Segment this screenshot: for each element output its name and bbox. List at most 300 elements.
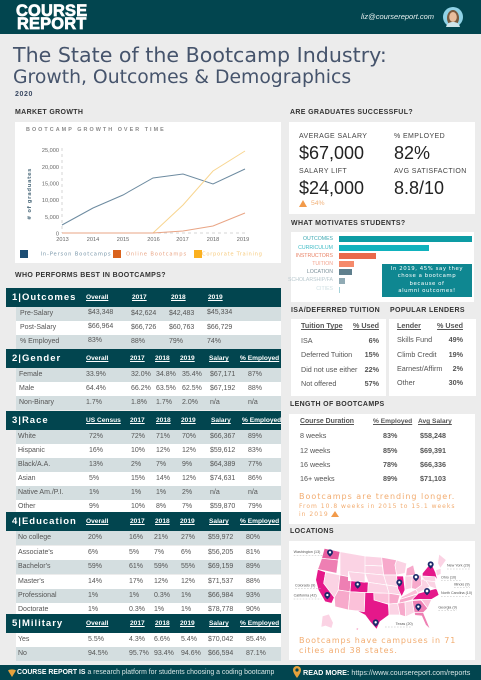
table: race: 15% (131, 475, 145, 482)
table: education: 61% (129, 563, 143, 570)
stat: satisfaction: 8.8/10 (394, 178, 444, 198)
table: education: Doctorate (18, 606, 48, 613)
heading: market growth: MARKET GROWTH (15, 109, 83, 116)
table: education: 81% (246, 548, 260, 556)
table: outcomes: $42,483 (169, 310, 194, 317)
callout: In 2019, 45% say they (391, 266, 463, 272)
table: education: 1% (88, 606, 98, 613)
military header: 2019 (180, 620, 195, 627)
table: outcomes (6, 288, 281, 349)
table: race: $59,870 (210, 503, 235, 510)
table: education: 20% (88, 534, 102, 541)
table: gender: Male (19, 385, 34, 392)
panel: lenders table: Lender (397, 321, 421, 330)
line chart: Online Bootcamps (126, 252, 187, 258)
table: outcomes: $66,726 (131, 324, 156, 331)
header bar (0, 0, 481, 34)
table: gender: 63.5% (156, 385, 176, 392)
stat: average salary: $67,000 (299, 143, 364, 163)
callout: campuses: cities and 38 states. (299, 646, 398, 654)
table: outcomes: % Employed (20, 338, 59, 345)
logo: COURSE (16, 2, 87, 20)
table: education: Associate's (18, 548, 53, 556)
stat: percent employed (394, 133, 445, 163)
education header: Overall (86, 518, 108, 525)
table: gender: n/a (248, 399, 258, 406)
table: education: 5% (129, 548, 139, 556)
table: race: Other (18, 503, 36, 510)
panel: length of bootcamps: $58,248 (420, 431, 446, 440)
race header: 2019 (181, 417, 196, 424)
callout: campuses (299, 636, 456, 654)
table: education: 1% (154, 606, 164, 613)
table: race: $74,631 (210, 475, 235, 482)
table: race: Black/A.A. (18, 461, 50, 468)
table: outcomes: $43,348 (88, 308, 113, 316)
map labels: Georgia (9) (438, 605, 457, 609)
panel: length of bootcamps: 12 weeks (300, 446, 330, 455)
table: education: $71,537 (208, 578, 233, 584)
map pins (324, 549, 434, 627)
callout: because of (410, 281, 444, 287)
gender header: 2019 (180, 355, 195, 362)
table: race: $66,367 (210, 433, 235, 440)
table: gender: 62.5% (182, 385, 202, 392)
table: gender (6, 349, 281, 410)
panel: motivations bar chart (291, 232, 474, 302)
bar: scholarship: SCHOLARSHIP/FA (288, 277, 333, 283)
table: gender: 35.4% (182, 371, 202, 378)
table: education: 90% (246, 606, 260, 613)
panel: market growth chart (15, 122, 281, 263)
table: education: 0.3% (154, 592, 170, 599)
panel: lenders table: 2% (453, 364, 463, 373)
line chart: 2014 (87, 237, 99, 243)
panel: length of bootcamps: 83% (383, 431, 397, 440)
table: race: 7% (182, 503, 192, 510)
table: education: 59% (154, 563, 168, 570)
table: education: $66,984 (208, 592, 233, 599)
table: gender: 88% (248, 385, 262, 392)
panel: length of bootcamps: $71,103 (420, 474, 446, 483)
callout: trending longer: Bootcamps are trending longer. (299, 492, 455, 501)
table: race: 2% (182, 489, 192, 496)
line chart: 15,000 (42, 182, 59, 188)
table: gender: 2.0% (182, 399, 198, 406)
chart title: BOOTCAMP GROWTH OVER TIME (26, 127, 166, 133)
table: education: 12% (181, 578, 195, 584)
table: race: 8% (156, 503, 166, 510)
line chart: 2013 (56, 237, 69, 243)
callout: chose a bootcamp (398, 273, 456, 279)
subtitle: Growth, Outcomes & Demographics (13, 67, 351, 88)
race header: 3|Race (12, 415, 49, 426)
table: education: 27% (181, 534, 195, 541)
callout (382, 264, 472, 297)
table: race: 9% (182, 461, 192, 468)
panel: lenders table: Earnest/Affirm (397, 364, 442, 373)
gender header: % Employed (240, 355, 279, 362)
callout: campuses: Bootcamps have campuses in 71 (299, 636, 456, 645)
heading: motivations: WHAT MOTIVATES STUDENTS? (291, 220, 406, 227)
panel: tuition table: ISA (301, 336, 313, 345)
panel: tuition table: Not offered (301, 379, 336, 388)
panel: lenders table: 49% (449, 335, 463, 344)
table: outcomes: $66,729 (207, 324, 232, 331)
panel: tuition table: 57% (365, 379, 379, 388)
bar: instructors: INSTRUCTORS (296, 253, 333, 259)
table: gender: 32.0% (131, 371, 151, 378)
icon: location pin (293, 666, 301, 678)
table: race: 10% (131, 503, 145, 510)
education header: 2017 (130, 518, 145, 525)
footer bar (0, 665, 481, 680)
table: education: 1% (129, 592, 139, 599)
table: military: 5.5% (88, 636, 104, 643)
military header (6, 614, 281, 633)
race header: % Employed (242, 417, 281, 424)
callout: trending longer (299, 492, 455, 518)
table: education: 93% (246, 592, 260, 599)
line chart: 2017 (176, 237, 189, 243)
education header: 4|Education (12, 516, 77, 527)
panel: length of bootcamps: 89% (383, 474, 397, 483)
map labels (294, 550, 472, 626)
table: race: 5% (89, 475, 99, 482)
line chart: 0 (56, 232, 59, 238)
table: race: 71% (156, 433, 170, 440)
table: race: 83% (248, 447, 262, 454)
table: race: 7% (156, 461, 166, 468)
table: education: 17% (129, 578, 143, 584)
table: race: Native Am./P.I. (18, 489, 63, 496)
stat: average salary (299, 133, 367, 163)
military header: Salary (209, 620, 229, 627)
panel: tuition table: 6% (369, 336, 379, 345)
table: outcomes: $66,964 (88, 322, 113, 330)
bar: curriculum (298, 245, 429, 251)
table: race: Hispanic (18, 447, 45, 454)
table: race: 16% (89, 447, 103, 454)
panel: length of bootcamps: 16 weeks (300, 460, 330, 469)
panel: tuition table: Deferred Tuition (301, 350, 352, 359)
table: education: 88% (246, 578, 260, 584)
panel: length of bootcamps: Avg Salary (418, 418, 452, 425)
table: race (6, 411, 281, 512)
table: military: 4.3% (129, 636, 145, 643)
icon: wifi signal (8, 669, 16, 677)
table: race: 79% (248, 503, 262, 510)
panel: locations (289, 541, 475, 660)
panel: length of bootcamps: % Employed (373, 418, 412, 425)
table: education: $59,972 (208, 534, 233, 541)
table: race: White (18, 433, 36, 440)
line chart: 2018 (207, 237, 219, 243)
panel: length of bootcamps: 85% (383, 446, 397, 455)
line chart (20, 148, 263, 258)
table: gender: 33.9% (86, 371, 106, 378)
stat: satisfaction: AVG SATISFACTION (394, 168, 467, 175)
table: race: 12% (182, 475, 196, 482)
table: race: 1% (89, 489, 99, 496)
table: gender: Female (19, 371, 42, 378)
race header: Salary (211, 417, 231, 424)
year: 2020 (15, 91, 33, 98)
table: education: 21% (154, 534, 168, 541)
map labels: Ohio (10) (441, 575, 456, 579)
panel: lenders table (389, 319, 476, 396)
military header: 2017 (130, 620, 145, 627)
heading: ISA: ISA/DEFERRED TUITION (291, 307, 380, 314)
line chart: 5,000 (45, 215, 59, 221)
education header: % Employed (240, 518, 279, 525)
bar: outcomes (303, 236, 472, 242)
gender header: Salary (209, 355, 229, 362)
table: education (6, 512, 281, 614)
table: gender: 34.8% (156, 371, 176, 378)
table: education: $69,159 (208, 563, 233, 570)
callout: alumni outcomes! (398, 288, 456, 294)
panel: lenders table: 30% (449, 378, 463, 387)
table: education: $56,205 (208, 548, 233, 556)
panel: tuition table: % Used (353, 321, 379, 330)
table: military: 94.6% (181, 650, 201, 656)
heading: lenders: POPULAR LENDERS (390, 307, 465, 314)
table: outcomes: Pre-Salary (20, 310, 53, 317)
table: race: 1% (131, 489, 141, 496)
callout: trending longer: From 10.8 weeks in 2015 to 15.1 weeks (299, 503, 455, 510)
table: race: 14% (156, 475, 170, 482)
heading: locations: LOCATIONS (290, 528, 334, 535)
icon: author portrait (443, 7, 463, 27)
title: The State of the Bootcamp Industry: (13, 43, 387, 67)
table: gender: Non-Binary (19, 399, 54, 406)
table: education: 1% (181, 606, 191, 613)
outcomes header: 2019 (208, 294, 223, 301)
table: gender: n/a (210, 399, 220, 406)
callout: trending longer: in 2019 (299, 510, 329, 518)
table: military: No (18, 650, 27, 656)
map of US campuses (294, 548, 472, 630)
table: race: 89% (248, 433, 262, 440)
line chart: In-Person Bootcamps (40, 252, 111, 258)
line chart: 2019 (237, 237, 249, 243)
table: race: $59,612 (210, 447, 235, 454)
line chart: Corporate Training (202, 252, 263, 258)
stat: percent employed: 82% (394, 143, 430, 163)
panel: tuition table: Tuition Type (301, 321, 343, 330)
table: race: 72% (89, 433, 103, 440)
bar: outcomes: OUTCOMES (303, 236, 333, 242)
bar: instructors (296, 253, 376, 259)
panel: length of bootcamps: $69,391 (420, 446, 446, 455)
logo: REPORT (17, 15, 86, 33)
table: education: No college (18, 534, 51, 541)
outcomes header: 2017 (132, 294, 147, 301)
table: race: 2% (131, 461, 141, 468)
table: education: 6% (88, 548, 98, 556)
line chart: 10,000 (42, 198, 59, 204)
bar: cities: CITIES (316, 286, 333, 292)
table: military: 85.4% (246, 636, 266, 643)
table: race: Asian (18, 475, 36, 482)
outcomes header: 1|Outcomes (12, 292, 76, 303)
map labels: Colorado (9) (295, 583, 315, 587)
table: military: 5.4% (181, 636, 197, 643)
stat: average salary: AVERAGE SALARY (299, 133, 367, 140)
table: race: 1% (156, 489, 166, 496)
map labels: North Carolina (10) (441, 591, 472, 595)
panel: length of bootcamps (289, 414, 475, 524)
table: outcomes: 79% (169, 338, 183, 345)
gender header (6, 349, 281, 368)
table: race: 86% (248, 475, 262, 482)
panel: length of bootcamps: Course Duration (300, 418, 354, 425)
table: race: 10% (131, 447, 145, 454)
table: outcomes: 83% (88, 336, 102, 344)
race header: 2017 (130, 417, 145, 424)
logo (16, 2, 87, 33)
gender header: 2|Gender (12, 353, 61, 364)
table: gender: 1.7% (86, 399, 102, 406)
table: education: 1% (88, 592, 98, 599)
table: outcomes: $45,334 (207, 309, 232, 316)
table: education: 80% (246, 534, 260, 541)
map labels: Texas (20) (396, 622, 413, 626)
military header: 2018 (155, 620, 170, 627)
table: race: 13% (89, 461, 103, 468)
panel: lenders table: Other (397, 378, 415, 387)
table: education: 59% (88, 563, 102, 570)
map labels: Illinois (9) (454, 582, 470, 586)
footer read more: READ MORE: https://www.coursereport.com/reports (303, 668, 470, 677)
table: education: 16% (129, 534, 143, 541)
table: gender: 87% (248, 371, 262, 378)
table: education: 55% (181, 563, 195, 570)
table: military (6, 614, 281, 661)
table: race: 12% (182, 447, 196, 454)
panel: lenders table: Skills Fund (397, 335, 432, 344)
heading: length: LENGTH OF BOOTCAMPS (290, 401, 385, 408)
line chart: 2016 (147, 237, 160, 243)
outcomes header: Overall (86, 294, 108, 301)
education header: 2018 (155, 518, 170, 525)
line chart: 20,000 (42, 165, 59, 171)
map labels: New York (29) (447, 563, 470, 567)
panel: tuition table (291, 319, 386, 396)
table: race: $64,389 (210, 461, 235, 468)
table: military: 87.1% (246, 650, 266, 656)
contact email: liz@coursereport.com (361, 12, 434, 21)
panel: tuition table: 15% (365, 350, 379, 359)
stat: satisfaction (394, 168, 467, 198)
education header (6, 512, 281, 531)
table: military: 6.6% (154, 636, 170, 643)
heading: are graduates successful: ARE GRADUATES SUCCESSFUL? (290, 109, 413, 116)
panel: lenders table: 19% (449, 350, 463, 359)
table: military: 94.5% (88, 650, 108, 656)
table: education: 89% (246, 563, 260, 570)
table: education: 1% (181, 592, 191, 599)
panel: length of bootcamps: 16+ weeks (300, 474, 335, 483)
table: education: Professional (18, 592, 57, 599)
table: education: Master's (18, 578, 44, 584)
table: gender: 1.7% (156, 399, 172, 406)
table: race: n/a (210, 489, 220, 496)
table: outcomes: Post-Salary (20, 324, 56, 331)
line chart: 2015 (117, 237, 129, 243)
line chart: 25,000 (42, 148, 59, 154)
table: gender: $67,192 (210, 385, 235, 392)
table: race: 70% (182, 433, 196, 440)
panel: tuition table: Did not use either (301, 365, 357, 374)
gender header: 2018 (155, 355, 170, 362)
line chart: # of graduates (27, 168, 33, 220)
table: education: $78,778 (208, 606, 233, 613)
table: gender: $67,171 (210, 371, 235, 378)
panel: tuition table: 22% (365, 365, 379, 374)
table: race: n/a (248, 489, 258, 496)
outcomes header (6, 288, 281, 307)
bar: tuition (312, 261, 354, 267)
education header: Salary (209, 518, 229, 525)
table: military: 93.4% (154, 650, 174, 656)
table: outcomes: 74% (207, 338, 221, 345)
race header: 2018 (156, 417, 171, 424)
table: military: Yes (18, 636, 29, 643)
bar: scholarship (288, 277, 345, 284)
panel: lenders table: % Used (437, 321, 463, 330)
table: gender: 1.8% (131, 399, 147, 406)
table: education: 14% (88, 578, 102, 584)
table: race: 12% (156, 447, 170, 454)
bar: curriculum: CURRICULUM (298, 245, 333, 251)
table: education: 0.3% (129, 606, 145, 613)
table: education: 7% (154, 548, 164, 556)
panel: lenders table: Climb Credit (397, 350, 437, 359)
table: military: 95.7% (129, 650, 149, 656)
table: outcomes: 88% (131, 338, 145, 345)
outcomes header: 2018 (171, 294, 186, 301)
table: outcomes: $42,624 (131, 310, 156, 317)
stat: salary lift (299, 168, 364, 207)
stat: salary lift: SALARY LIFT (299, 168, 347, 175)
table: education: 6% (181, 548, 191, 556)
bar: location: LOCATION (307, 269, 333, 275)
stat: salary lift: $24,000 (299, 178, 364, 198)
stat: percent employed: % EMPLOYED (394, 133, 445, 140)
map labels: Washington (13) (294, 550, 320, 554)
military header: % Employed (240, 620, 279, 627)
table: outcomes: $60,763 (169, 324, 194, 331)
panel: length of bootcamps: 78% (383, 460, 397, 469)
panel: length of bootcamps: $66,336 (420, 460, 446, 469)
stat: salary lift: 54% (311, 200, 325, 207)
table: military: $70,042 (208, 636, 233, 643)
race header (6, 411, 281, 430)
map labels: California (42) (294, 594, 317, 598)
table: military: $66,594 (208, 650, 233, 656)
panel: length of bootcamps: 8 weeks (300, 431, 326, 440)
table: race: 9% (89, 503, 99, 510)
bar: tuition: TUITION (312, 261, 333, 267)
table: race: 72% (131, 433, 145, 440)
gender header: 2017 (130, 355, 145, 362)
education header: 2019 (180, 518, 195, 525)
table: gender: 64.4% (86, 385, 106, 392)
footer about text: COURSE REPORT IS a research platform for students choosing a coding bootcamp (17, 669, 274, 676)
bar: location (307, 269, 352, 275)
